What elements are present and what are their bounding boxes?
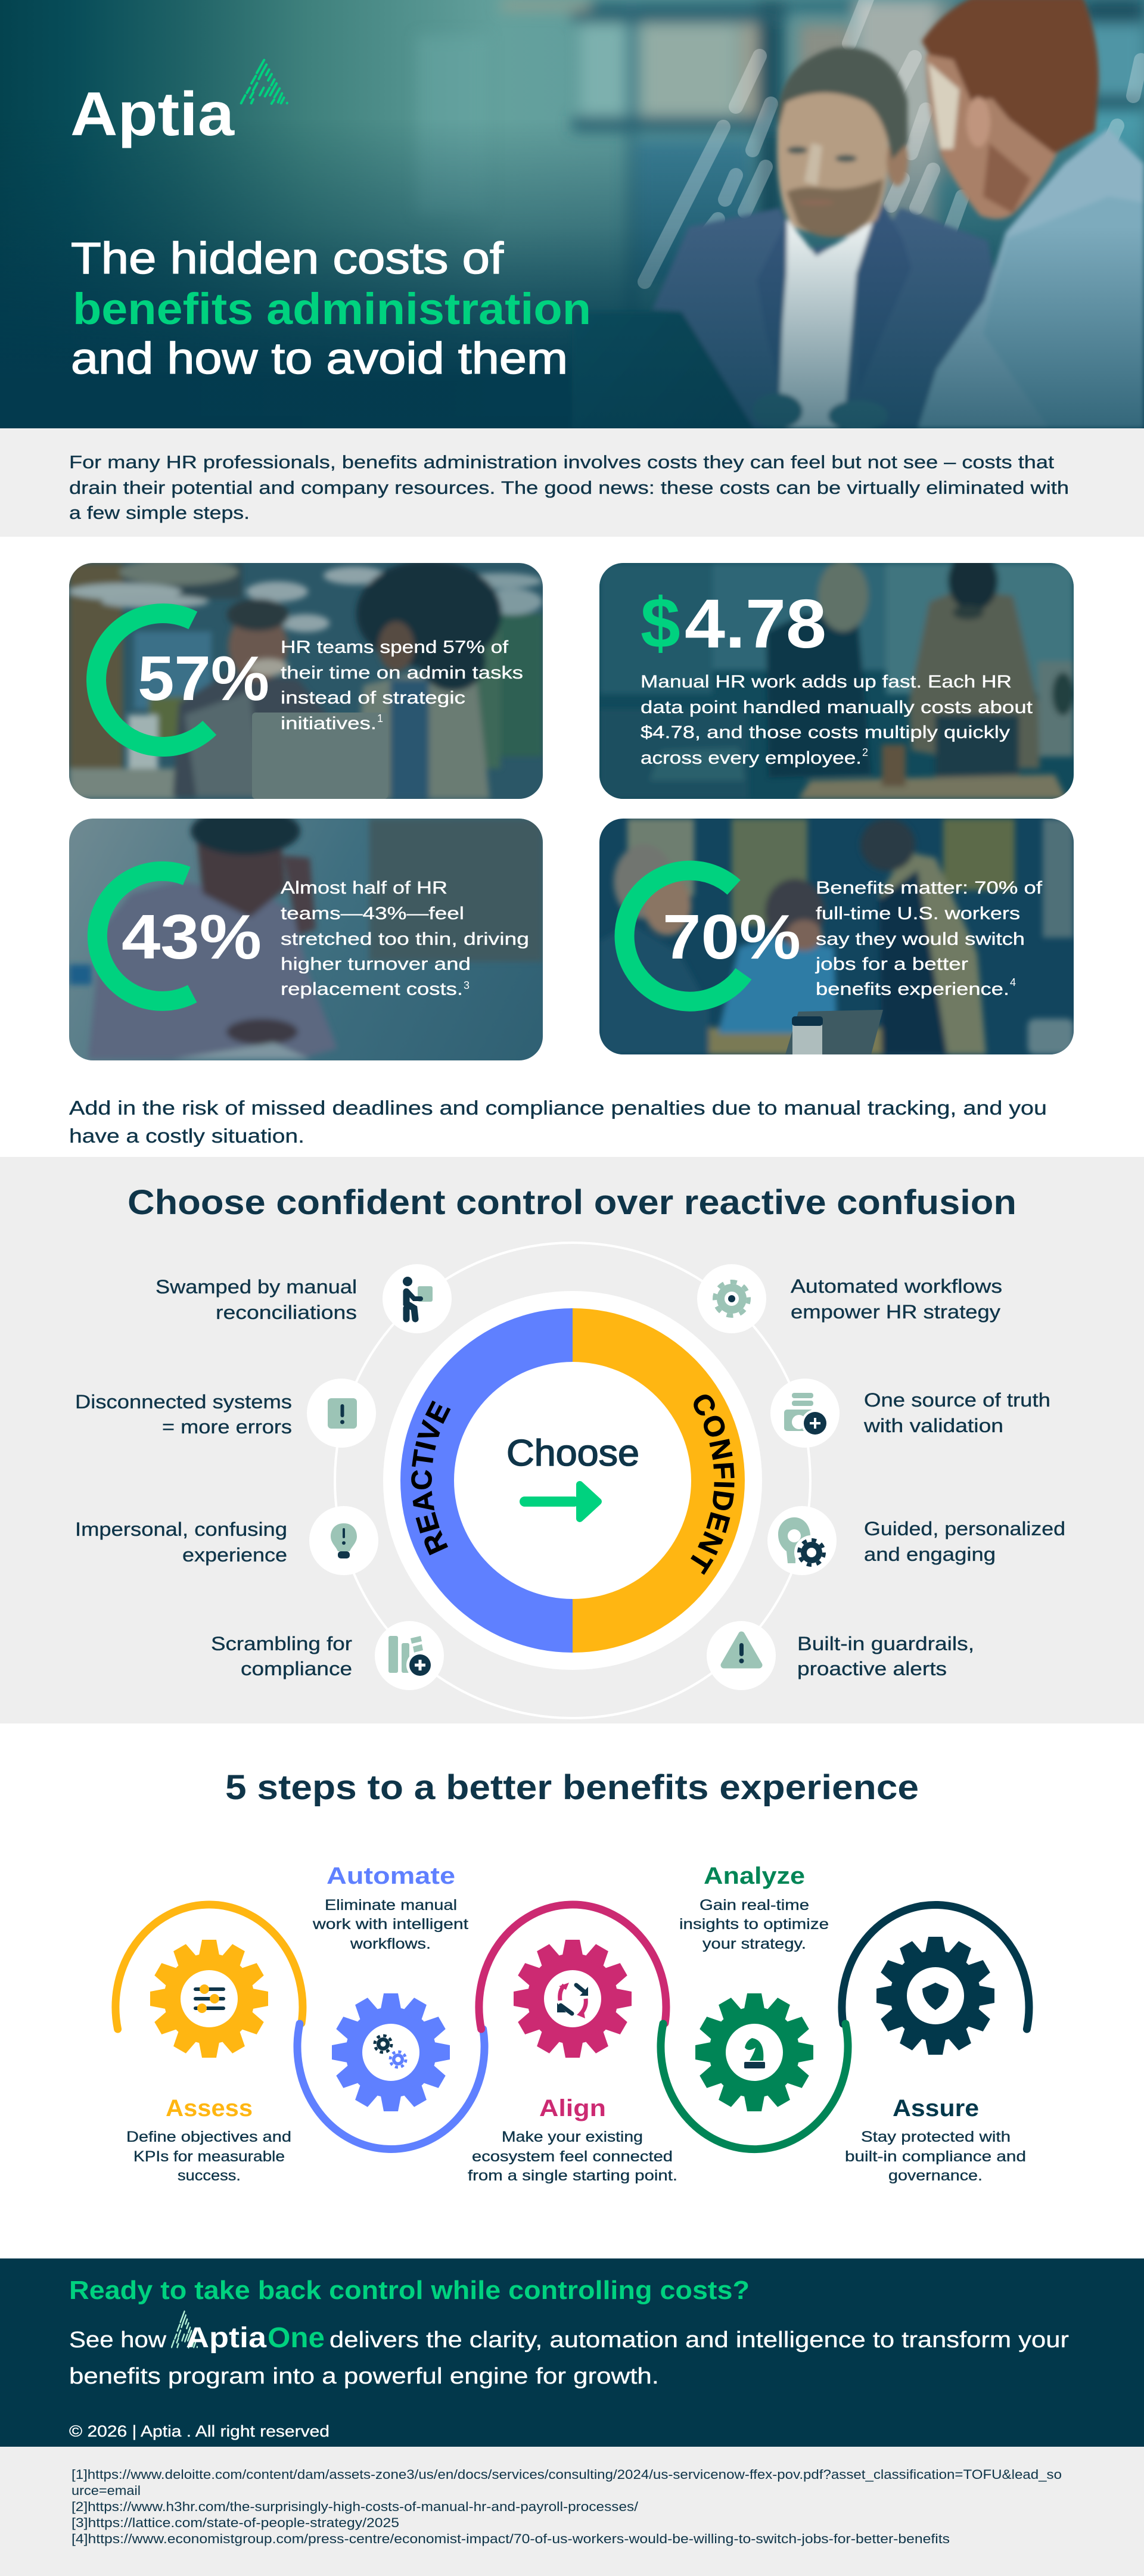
step: Align: [468, 1940, 677, 2184]
panel: stat card 70%: [599, 819, 1074, 1054]
label: Disconnected systems: [75, 1391, 292, 1413]
body text with AptiaOne logo: delivers the clarity, automation and intelligence to transform your: [329, 2328, 1069, 2353]
icon: logo hatch mark: [241, 60, 287, 104]
step text: insights to optimize: [679, 1916, 829, 1933]
body text with AptiaOne logo: benefits program into a powerful engine for growth.: [69, 2364, 659, 2389]
label: One source of truth: [864, 1389, 1050, 1411]
lapel shadows: [770, 225, 789, 317]
icon: cog: [697, 1264, 766, 1333]
title: and how to avoid them: [71, 334, 568, 383]
donut chart: reactive / confident: [383, 1291, 762, 1670]
stat text: Manual HR work adds up fast. Each HR: [641, 672, 1012, 692]
step text: workflows.: [350, 1936, 431, 1952]
card photo: colleagues at a desk: [599, 551, 1074, 799]
ring label: REACTIVE: C: [406, 1470, 438, 1491]
stat text: instead of strategic: [281, 688, 465, 708]
label: [211, 1633, 352, 1679]
closing sentence: have a costly situation.: [69, 1125, 304, 1147]
label: [797, 1633, 974, 1679]
ring label: CONFIDENT: [682, 1388, 739, 1578]
logo: AptiaOne: Aptia: [186, 2322, 266, 2354]
label: Scrambling for: [211, 1633, 352, 1654]
center label: Choose: [506, 1433, 639, 1474]
laptop: [572, 312, 754, 428]
second man hair: [922, 0, 1099, 154]
panel: references: [1]https://www.deloitte.com/content/dam/assets-zone3/us/en/docs/services/consulting/2024/us-servicenow-ffex-pov.pdf?asset_classification=TOFU&lead_so: [72, 2467, 1062, 2482]
stat value: 57%: [138, 643, 269, 714]
step text: Define objectives and: [126, 2129, 291, 2145]
label: [75, 1519, 287, 1566]
step text: from a single starting point.: [468, 2167, 677, 2184]
icon: exclamation square: [307, 1379, 376, 1448]
label: Swamped by manual: [156, 1276, 357, 1298]
label: proactive alerts: [797, 1658, 947, 1679]
panel: references: [2]https://www.h3hr.com/the-surprisingly-high-costs-of-manual-hr-and-payroll-processes/: [72, 2499, 639, 2514]
gear icon: [332, 1993, 450, 2111]
stat value: 4.78: [685, 585, 826, 662]
face: [777, 82, 888, 235]
stat text: [281, 878, 529, 999]
step text: KPIs for measurable: [133, 2148, 285, 2165]
ring gauge: [97, 613, 210, 746]
stat text: full-time U.S. workers: [816, 904, 1020, 923]
panel: 5 steps: [116, 1768, 1029, 2184]
stat text: benefits experience.: [816, 979, 1009, 999]
step: Automate: [312, 1863, 468, 2111]
stat value: 43%: [122, 902, 262, 972]
stat text: teams—43%—feel: [281, 904, 464, 923]
step: Assure: [845, 1937, 1026, 2184]
stat text: [281, 637, 523, 733]
logo: AptiaOne: [172, 2311, 325, 2354]
stat text: 1: [377, 713, 383, 724]
label: Impersonal, confusing: [75, 1519, 287, 1540]
panel: call to action footer: [0, 2258, 1144, 2447]
step text: Eliminate manual: [325, 1897, 457, 1914]
step title: Assess: [166, 2095, 253, 2121]
icon: binders with plus: [375, 1621, 444, 1690]
ring gauge: [97, 871, 192, 1001]
stat text: 4: [1010, 976, 1016, 988]
stat text: Benefits matter: 70% of: [816, 878, 1043, 898]
panel: intro paragraph: For many HR professionals, benefits administration involves costs they can feel but not see – costs that: [69, 452, 1054, 472]
stat text: [641, 672, 1033, 768]
step text: [126, 2129, 291, 2184]
step text: [312, 1897, 468, 1952]
ring label: CONFIDENT: N: [703, 1436, 738, 1463]
stat text: higher turnover and: [281, 954, 471, 974]
stat text: initiatives.: [281, 714, 377, 733]
gear icon: [695, 1993, 813, 2111]
stat text: their time on admin tasks: [281, 663, 523, 683]
hands: [775, 391, 804, 428]
step title: Align: [539, 2095, 606, 2121]
panel: intro paragraph: a few simple steps.: [69, 502, 250, 523]
label: Automated workflows: [791, 1275, 1002, 1297]
gear icon: [514, 1940, 632, 2058]
panel: intro paragraph: [0, 428, 1144, 537]
label: [156, 1276, 357, 1323]
body text with AptiaOne logo: See how: [69, 2328, 167, 2353]
card photo: team meeting: [599, 819, 1074, 1054]
icon: light bulb: [309, 1506, 378, 1575]
panel: stat card 43%: [69, 807, 543, 1060]
copyright: © 2026 | Aptia . All right reserved: [69, 2422, 329, 2440]
step text: [679, 1897, 829, 1952]
label: compliance: [241, 1658, 352, 1679]
ring label: CONFIDENT: E: [700, 1509, 735, 1536]
ring label: REACTIVE: V: [412, 1417, 448, 1446]
label: [863, 1389, 1050, 1436]
ring label: REACTIVE: R: [417, 1527, 455, 1559]
panel: stat card 57%: [69, 559, 543, 799]
body text with AptiaOne logo: [69, 2311, 1069, 2389]
stat value: 70%: [663, 902, 801, 972]
logo: AptiaOne: One: [268, 2322, 325, 2354]
stat text: replacement costs.: [281, 979, 463, 999]
step text: built-in compliance and: [845, 2148, 1026, 2165]
heading: 5 steps to a better benefits experience: [225, 1768, 919, 1807]
card photo: stressed woman: [69, 807, 543, 1060]
icon: database with plus: [770, 1379, 840, 1448]
stat text: stretched too thin, driving: [281, 929, 529, 949]
step title: Automate: [327, 1863, 455, 1889]
label: and engaging: [864, 1544, 996, 1565]
second man shirt: [918, 129, 1144, 428]
label: [791, 1275, 1002, 1323]
stat text: jobs for a better: [815, 954, 968, 974]
stat text: Almost half of HR: [281, 878, 447, 898]
stat text: 3: [464, 979, 470, 991]
ring label: REACTIVE: E: [411, 1509, 446, 1536]
heading: Choose confident control over reactive confusion: [128, 1183, 1016, 1222]
stat text: say they would switch: [816, 929, 1025, 949]
ring label: REACTIVE: [406, 1397, 456, 1559]
label: Built-in guardrails,: [797, 1633, 974, 1654]
panel: references: urce=email: [72, 2483, 141, 2498]
ring label: CONFIDENT: D: [705, 1488, 739, 1513]
label: empower HR strategy: [791, 1301, 1000, 1323]
label: experience: [182, 1544, 287, 1566]
step text: Gain real-time: [700, 1897, 809, 1914]
panel: stat card $4.78: [599, 551, 1074, 799]
step title: Assure: [893, 2095, 979, 2121]
step: Assess: [126, 1940, 291, 2184]
label: Guided, personalized: [864, 1518, 1065, 1539]
step text: ecosystem feel connected: [472, 2148, 673, 2165]
stat text: [815, 878, 1043, 999]
closing sentence: [69, 1097, 1047, 1147]
panel: references: [4]https://www.economistgroup.com/press-centre/economist-impact/70-of-us-workers-would-be-willing-to-switch-jobs-for-better-benefits: [72, 2531, 950, 2546]
step text: your strategy.: [702, 1936, 806, 1952]
gear icon: [876, 1937, 994, 2055]
ring label: CONFIDENT: N: [691, 1527, 729, 1559]
panel: intro paragraph: drain their potential and company resources. The good news: these costs can be virtually eliminated with: [69, 477, 1069, 498]
step text: governance.: [888, 2167, 983, 2184]
logo: Aptia: [70, 60, 287, 149]
card photo: colleagues at laptop: [69, 559, 543, 799]
suit: [652, 208, 996, 428]
step title: Analyze: [704, 1863, 805, 1889]
gear icon: [150, 1940, 268, 2058]
ring label: CONFIDENT: F: [707, 1461, 739, 1480]
step text: Make your existing: [502, 2129, 643, 2145]
panel: hero banner: [0, 0, 1144, 431]
heading: Ready to take back control while controlling costs?: [69, 2276, 750, 2305]
label: reconciliations: [216, 1302, 357, 1323]
title: The hidden costs of: [71, 234, 503, 283]
label: [75, 1391, 292, 1438]
label: [864, 1518, 1065, 1565]
arrow: [520, 1485, 598, 1519]
stat text: 2: [862, 746, 868, 758]
second man face: [926, 42, 1064, 219]
connected arcs: [116, 1905, 1029, 2149]
hero photo: two men at a laptop: [0, 0, 1144, 431]
ring gauge: [624, 870, 744, 1001]
ring label: REACTIVE: I: [410, 1438, 443, 1454]
icon: warning triangle: [707, 1621, 776, 1690]
step text: success.: [178, 2167, 241, 2184]
step text: work with intelligent: [312, 1916, 468, 1933]
logo: Aptia: Aptia: [70, 80, 235, 149]
icon: person carrying box: [383, 1264, 452, 1333]
ring label: REACTIVE: E: [420, 1397, 456, 1428]
step text: [468, 2129, 677, 2184]
stat text: across every employee.: [641, 748, 862, 768]
panel: confident vs reactive: [0, 1157, 1144, 1723]
title: [71, 234, 591, 383]
stat text: data point handled manually costs about: [641, 698, 1033, 717]
ring label: CONFIDENT: I: [708, 1480, 739, 1489]
shirt: [778, 200, 881, 428]
step text: [845, 2129, 1026, 2184]
stat text: $4.78, and those costs multiply quickly: [641, 723, 1010, 742]
stat value: $: [641, 583, 680, 663]
ring label: REACTIVE: T: [407, 1448, 440, 1470]
label: with validation: [863, 1415, 1003, 1436]
ring label: CONFIDENT: T: [682, 1546, 718, 1578]
ring label: CONFIDENT: O: [695, 1411, 732, 1442]
icon: head with gear: [767, 1506, 837, 1575]
stat text: HR teams spend 57% of: [281, 637, 509, 657]
closing sentence: Add in the risk of missed deadlines and compliance penalties due to manual tracking, and you: [69, 1097, 1047, 1119]
panel: references: [0, 2447, 1144, 2576]
title: benefits administration: [73, 284, 591, 334]
panel: references: [3]https://lattice.com/state-of-people-strategy/2025: [72, 2515, 399, 2530]
step text: Stay protected with: [861, 2129, 1011, 2145]
step: Analyze: [679, 1863, 829, 2111]
ring label: CONFIDENT: C: [685, 1388, 722, 1422]
ring label: REACTIVE: A: [406, 1489, 441, 1514]
label: = more errors: [162, 1416, 292, 1438]
